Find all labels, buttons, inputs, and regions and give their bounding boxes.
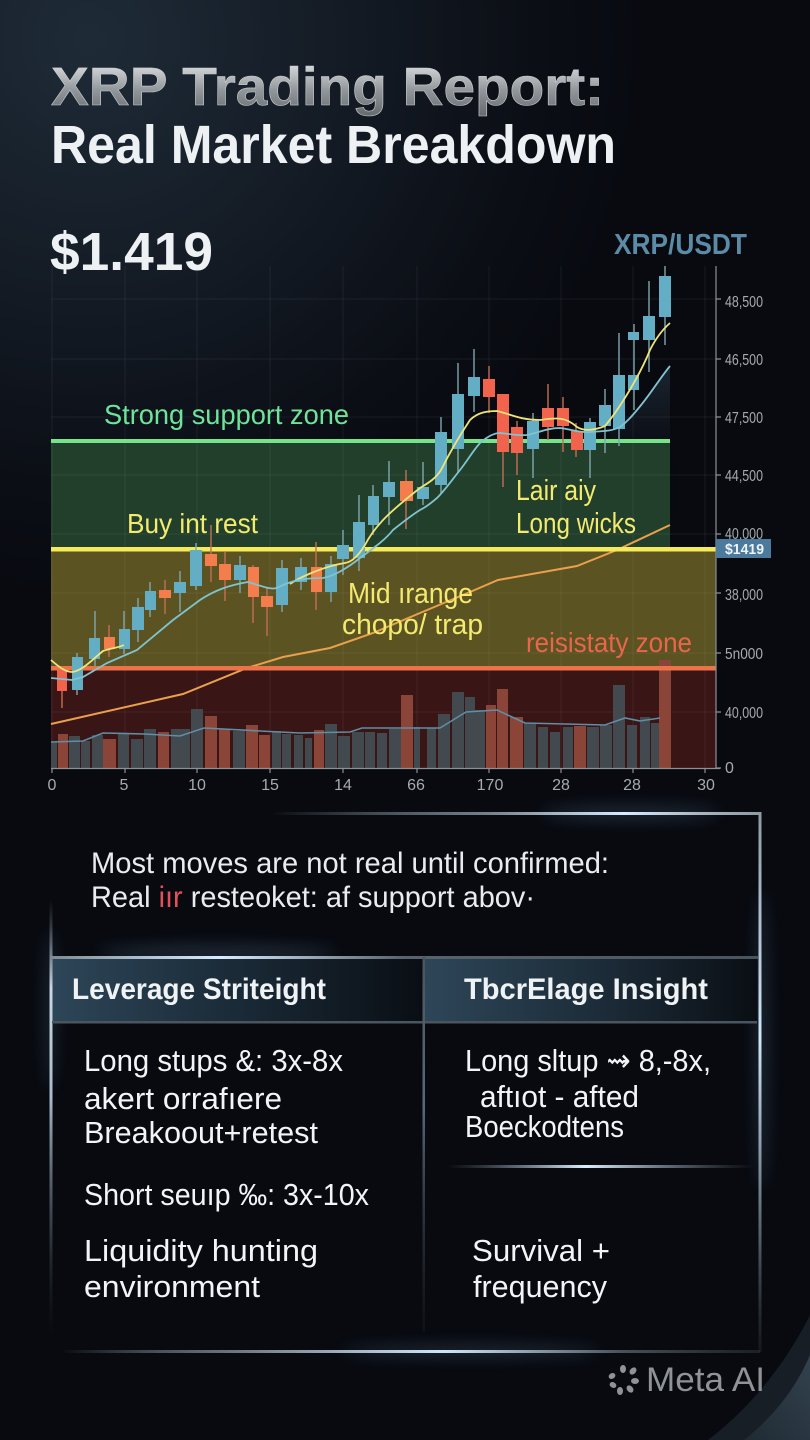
left column text: environment [84, 1269, 260, 1304]
x axis labels [48, 777, 715, 794]
left column text: Short seuıp ‰: 3x-10x [84, 1177, 369, 1212]
label: strong support zone: Strong support zone [104, 399, 349, 430]
heading: leverage insight: TbcrElage Insight [464, 973, 708, 1006]
volume average line [51, 710, 660, 742]
left column text: Liquidity hunting [84, 1233, 318, 1268]
y axis labels [725, 294, 763, 777]
right column text: Long sltup ⇝ 8,-8x, [465, 1043, 711, 1078]
price tag [716, 539, 771, 558]
x axis labels: 66 [407, 777, 425, 794]
message text [91, 847, 609, 914]
title line 1: XRP Trading Report: [51, 57, 604, 117]
message text: Real iır resteoket: af support abov· [91, 881, 535, 914]
chart [48, 266, 771, 794]
corner accent curve [708, 1315, 810, 1440]
zone: yellow mid range [51, 549, 716, 668]
x axis labels: 14 [334, 777, 352, 794]
label: buy interest: Buy int rest [127, 508, 258, 539]
x axis labels: 0 [48, 777, 57, 794]
y axis labels: 44,500 [725, 468, 763, 485]
right axis [716, 266, 721, 768]
watermark text: Meta AI [646, 1361, 765, 1399]
volume bars [51, 660, 671, 768]
x axis labels: 28 [552, 777, 570, 794]
resistance line [51, 666, 716, 670]
x axis labels: 170 [477, 777, 503, 794]
price tag: $1419 [725, 541, 764, 558]
right column text: Survival + [472, 1233, 610, 1268]
heading: leverage strategy: Leverage Striteight [72, 973, 326, 1006]
right column text [465, 1043, 711, 1304]
candlesticks [57, 266, 671, 708]
panel glow [45, 806, 768, 1357]
panel: strategy frame [45, 806, 768, 1357]
buy interest line [51, 547, 718, 552]
label: long wicks: Long wicks [516, 508, 636, 540]
x axis labels: 5 [120, 777, 129, 794]
y axis labels: 46,500 [725, 352, 763, 369]
moving average: yellow [51, 323, 670, 672]
upper right area shade [610, 366, 670, 441]
left column header [52, 958, 423, 1022]
y axis labels: 47,500 [725, 410, 763, 427]
message text: Most moves are not real until confirmed: [91, 847, 609, 880]
label: long wicks [516, 475, 636, 540]
right column text: Boeckodtens [465, 1109, 624, 1144]
title line 2: Real Market Breakdown [51, 115, 616, 175]
frame lines [50, 812, 762, 1353]
support line [51, 439, 670, 443]
y axis labels: 48,500 [725, 294, 763, 311]
moving average: orange [51, 525, 670, 724]
pair label: XRP/USDT [614, 229, 747, 261]
label: mid range chop trap: Mid ırange [348, 578, 473, 610]
left column text: Breakoout+retest [84, 1115, 318, 1150]
y axis labels: 40,000 [725, 526, 763, 543]
right column text: aftıot - afted [480, 1079, 639, 1114]
y axis labels: 5n000 [725, 646, 763, 663]
label: mid range chop trap: chopo/ trap [342, 609, 483, 641]
label: long wicks: Lair aiy [516, 475, 596, 507]
current price: $1.419 [50, 222, 213, 282]
right column header [425, 958, 757, 1022]
title [51, 57, 616, 175]
zone: green support [51, 441, 670, 549]
icon: meta ai dots [608, 1365, 639, 1395]
y axis labels: 38,000 [725, 587, 763, 604]
moving average: teal [51, 366, 670, 680]
label: resistance zone: reisistaty zone [526, 627, 692, 658]
right column text: frequency [473, 1269, 607, 1304]
x axis labels: 10 [188, 777, 206, 794]
y axis labels: 40,000 [725, 705, 763, 722]
label: mid range chop trap [342, 578, 483, 641]
level lines [51, 439, 718, 670]
grid [51, 266, 716, 768]
zone: red resistance [51, 668, 716, 768]
x axis labels: 28 [623, 777, 641, 794]
left column text: Long stups &: 3x-8x [84, 1043, 343, 1078]
left column text: akert orrafıere [84, 1081, 282, 1116]
x axis labels: 30 [697, 777, 715, 794]
x axis labels: 15 [261, 777, 279, 794]
watermark [608, 1361, 765, 1399]
y axis labels: 0 [725, 760, 734, 777]
bottom axis [51, 768, 720, 773]
left column text [84, 1043, 369, 1304]
